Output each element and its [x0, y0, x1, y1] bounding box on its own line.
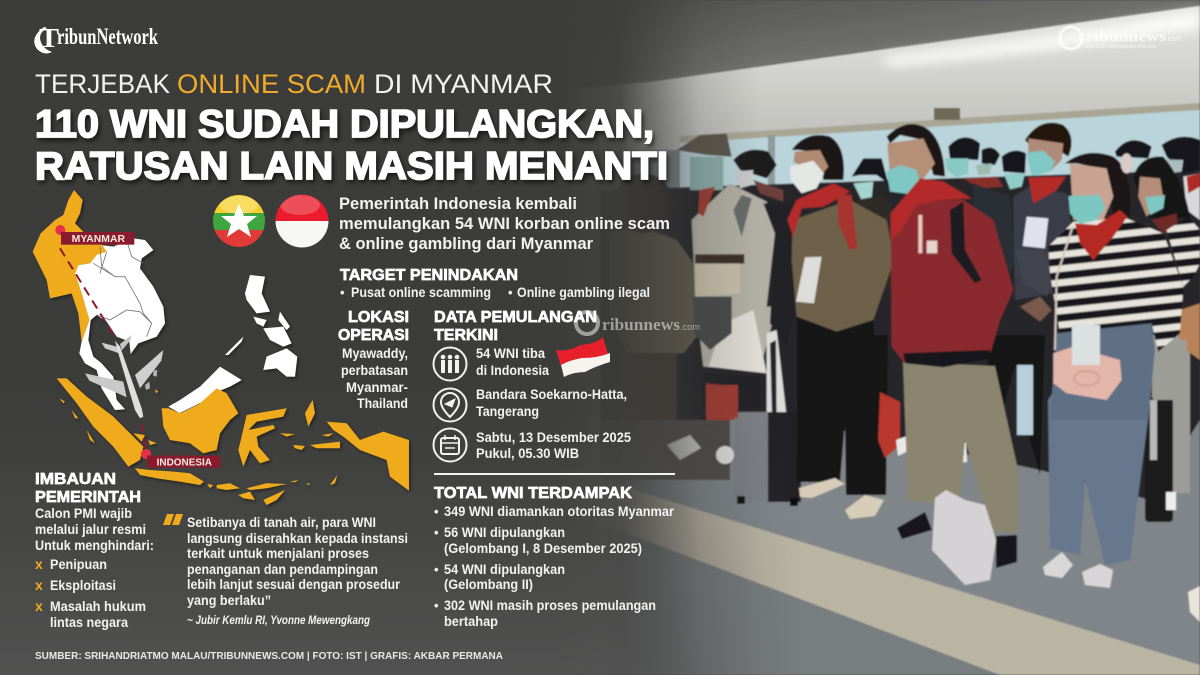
lokasi operasi: OPERASI [338, 327, 409, 344]
photo: repatriated citizens standing in airport corridor [540, 0, 1200, 675]
data pemulangan heading: TERKINI [434, 327, 498, 344]
watermark tribunnews center: ribunnews [602, 315, 680, 334]
man in red hoodie [887, 124, 1013, 367]
main title: 110 WNI SUDAH DIPULANGKAN, [35, 103, 654, 146]
Kalimantan [162, 388, 238, 453]
woman in striped top [1048, 153, 1183, 420]
quote text: terkait untuk menjalani proses [187, 546, 369, 561]
trousers of man in red [903, 362, 1018, 532]
lokasi operasi: perbatasan [341, 363, 408, 378]
target penindakan: TARGET PENINDAKAN [340, 267, 518, 284]
total WNI terdampak: • [434, 504, 439, 519]
lokasi operasi: Myanmar- [346, 380, 408, 395]
kicker heading: DI MYANMAR [374, 69, 553, 99]
people lower half [667, 335, 1200, 622]
kicker heading: TERJEBAK [35, 69, 170, 99]
target penindakan: Pusat online scamming [351, 285, 491, 300]
imbauan pemerintah: Untuk menghindari: [35, 538, 154, 553]
main title [35, 103, 668, 188]
total WNI terdampak: (Gelombang I, 8 Desember 2025) [444, 541, 642, 556]
imbauan pemerintah: Penipuan [50, 557, 107, 572]
intro paragraph [339, 194, 670, 253]
crowd dark mass [600, 170, 1200, 500]
top right watermark: tribunnews [1060, 27, 1181, 50]
target penindakan [340, 267, 650, 300]
white plastic bag [932, 490, 996, 585]
far left person [610, 227, 697, 353]
imbauan pemerintah: Calon PMI wajib [35, 506, 132, 521]
total WNI terdampak: (Gelombang II) [444, 577, 533, 592]
dark legs behind [985, 335, 1045, 475]
imbauan pemerintah: Eksploitasi [50, 578, 116, 593]
quote text: yang berlaku” [187, 593, 271, 608]
text: airport: Bandara Soekarno-Hatta, [476, 387, 627, 402]
Papua [327, 422, 409, 491]
intro paragraph: memulangkan 54 WNI korban online scam [339, 214, 670, 233]
main title: RATUSAN LAIN MASIH MENANTI [35, 145, 668, 188]
imbauan pemerintah: Masalah hukum [50, 599, 146, 614]
top right watermark: tribunnews: Bisa Lebih Menginspirasi Indonesia [1086, 44, 1156, 50]
logo: Tribun Network: ribunNetwork [57, 24, 158, 49]
quote text: Setibanya di tanah air, para WNI [187, 515, 376, 530]
icon: calendar [434, 428, 466, 462]
people right half [887, 123, 1200, 420]
lokasi operasi: Thailand [357, 396, 408, 411]
total WNI terdampak [434, 485, 675, 629]
imbauan pemerintah [35, 471, 154, 630]
quote text: lebih lanjut sesuai dengan prosedur [187, 577, 401, 592]
Sulawesi and Maluku [238, 400, 340, 467]
pin Myanmar [55, 225, 65, 235]
imbauan pemerintah: x [35, 598, 43, 614]
intro paragraph: Pemerintah Indonesia kembali [339, 194, 577, 213]
flag: Indonesia [275, 194, 329, 248]
hat person [852, 158, 898, 293]
person in black cap [703, 150, 797, 420]
jeans [1048, 340, 1152, 565]
pin Indonesia [141, 449, 151, 459]
lokasi operasi: Myawaddy, [342, 346, 408, 361]
total WNI terdampak: bertahap [444, 614, 498, 629]
total WNI terdampak: 54 WNI dipulangkan [444, 562, 565, 577]
Sumatra [57, 378, 158, 467]
total WNI terdampak: TOTAL WNI TERDAMPAK [434, 485, 632, 502]
imbauan pemerintah: IMBAUAN [35, 471, 116, 488]
text: arrivals: 54 WNI tiba [476, 346, 545, 361]
imbauan pemerintah: x [35, 577, 43, 593]
imbauan pemerintah: x [35, 556, 43, 572]
logo: Tribun Network: T [39, 23, 59, 53]
watermark tribunnews center: .com [680, 322, 700, 332]
kicker heading: ONLINE SCAM [177, 69, 366, 99]
text: date: Pukul, 05.30 WIB [476, 446, 579, 461]
top right watermark: tribunnews: .com [1166, 36, 1181, 43]
man with mask, dark jacket [1013, 123, 1072, 322]
Java and Lesser Sunda [135, 468, 337, 505]
back row [945, 137, 1200, 307]
watermark tribunnews center [576, 312, 700, 334]
quote text: langsung diserahkan kepada instansi [187, 531, 408, 546]
person in olive jacket [787, 135, 894, 420]
total WNI terdampak: 302 WNI masih proses pemulangan [444, 598, 656, 613]
imbauan pemerintah: melalui jalur resmi [35, 522, 146, 537]
label Indonesia: INDONESIA [157, 457, 212, 468]
top right watermark: tribunnews: ribunnews [1086, 29, 1166, 45]
text: date: Sabtu, 13 Desember 2025 [476, 430, 631, 445]
label Myanmar [61, 232, 134, 245]
airplane [85, 335, 163, 418]
imbauan pemerintah: PEMERINTAH [35, 489, 141, 506]
lokasi operasi [338, 309, 409, 411]
right suitcase and person [1152, 335, 1190, 493]
intro paragraph: & online gambling dari Myanmar [339, 234, 593, 253]
text: airport: Tangerang [476, 404, 539, 419]
people left half [610, 133, 898, 420]
text: date [476, 430, 631, 461]
total WNI terdampak: • [434, 562, 439, 577]
icon: airport pin [434, 388, 466, 422]
mainland white countries [75, 238, 165, 410]
logo: Tribun Network [34, 23, 158, 53]
text: arrivals [476, 346, 549, 378]
total WNI terdampak: • [434, 598, 439, 613]
label Indonesia [147, 456, 220, 468]
floor stripe [540, 458, 1200, 675]
Philippines [225, 275, 297, 377]
route line dashed [60, 248, 146, 452]
target penindakan: Online gambling ilegal [517, 285, 650, 300]
target penindakan: • [508, 285, 513, 300]
imbauan pemerintah: lintas negara [50, 615, 128, 630]
source credits: SUMBER: SRIHANDRIATMO MALAU/TRIBUNNEWS.COM | FOTO: IST | GRAFIS: AKBAR PERMANA [35, 650, 503, 662]
data pemulangan heading: DATA PEMULANGAN [434, 309, 597, 326]
dark gradient overlay over photo [0, 0, 760, 675]
total WNI terdampak: • [434, 525, 439, 540]
data pemulangan heading [434, 309, 597, 344]
Myanmar in orange [33, 190, 107, 342]
text: airport [476, 387, 627, 419]
map of Southeast Asia with route [33, 190, 409, 505]
quote text: penanganan dan pendampingan [187, 562, 378, 577]
flag: Myanmar [213, 195, 265, 248]
text: arrivals: di Indonesia [476, 363, 549, 378]
woman at right [1133, 157, 1200, 400]
flag: waving Indonesia [556, 337, 610, 377]
lokasi operasi: LOKASI [348, 309, 409, 326]
target penindakan: • [340, 285, 345, 300]
label Myanmar: MYANMAR [72, 234, 125, 245]
quote text: ~ Jubir Kemlu RI, Yvonne Mewengkang [187, 615, 370, 627]
icon: people [434, 348, 466, 380]
Borneo north [168, 367, 242, 413]
quote text [187, 515, 408, 627]
icon: quote mark [163, 514, 183, 525]
luggage [734, 412, 801, 502]
total WNI terdampak: 349 WNI diamankan otoritas Myanmar [444, 504, 675, 519]
internal borders [93, 240, 200, 413]
person in beige jacket [677, 133, 777, 373]
total WNI terdampak: 56 WNI dipulangkan [444, 525, 565, 540]
